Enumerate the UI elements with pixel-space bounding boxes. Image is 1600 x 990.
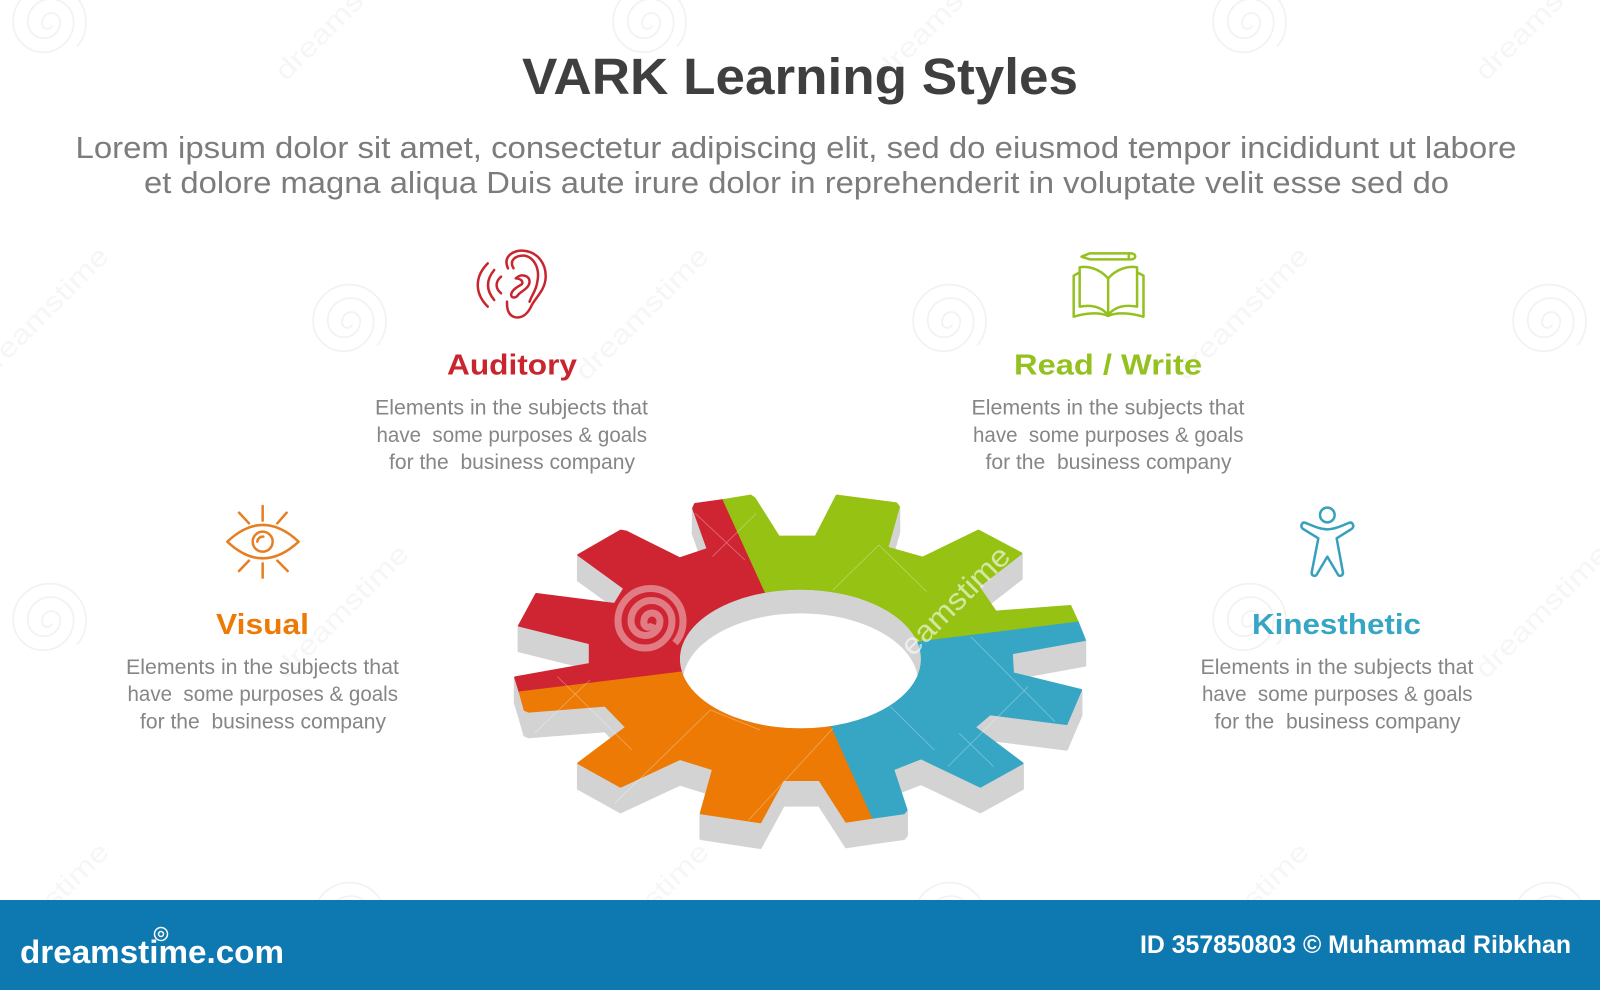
text block: Read / Write description: for the business company — [986, 451, 1232, 474]
text block: Auditory description — [375, 396, 648, 474]
heading: Read / Write: Read / Write — [1014, 350, 1202, 382]
gear hole — [680, 590, 921, 728]
gear segment: blue — [800, 623, 1085, 818]
text block: Visual description — [126, 656, 399, 734]
watermark wordmarks: dreamstime — [1169, 837, 1315, 982]
subtitle text: Lorem ipsum dolor sit amet, consectetur adipiscing elit, sed do eiusmod tempor incididunt ut labore — [76, 130, 1516, 165]
subtitle text — [76, 130, 1516, 200]
icon: person — [1301, 508, 1353, 576]
faint watermark lines on gear — [534, 513, 1055, 820]
icon: eye — [227, 506, 299, 578]
gear segment: orange — [520, 659, 873, 822]
text block: Kinesthetic description: for the business company — [1214, 710, 1461, 734]
gear side extrusion — [515, 497, 1085, 848]
text block: Visual description: for the business company — [140, 710, 386, 734]
gear segment: red — [515, 500, 800, 692]
icon: book and pencil — [1074, 253, 1143, 317]
gear diagram — [515, 496, 1085, 848]
text block: Kinesthetic description — [1200, 656, 1474, 734]
text block: Kinesthetic description: have some purposes & goals — [1202, 683, 1472, 706]
text block: Auditory description: for the business company — [389, 451, 635, 474]
text block: Visual description: Elements in the subjects that — [126, 656, 399, 679]
footer bar — [0, 900, 1600, 990]
text block: Read / Write description: have some purposes & goals — [973, 424, 1244, 447]
watermark wordmarks: dreamstime — [269, 539, 415, 684]
icon: ear — [478, 251, 546, 317]
text block: Read / Write description: Elements in the subjects that — [972, 396, 1245, 420]
subtitle text: et dolore magna aliqua Duis aute irure dolor in reprehenderit in voluptate velit esse sed do — [144, 165, 1449, 200]
watermark wordmarks: dreamstime — [1169, 241, 1315, 386]
watermark wordmarks: dreamstime — [1469, 539, 1600, 684]
heading: Visual: Visual — [216, 609, 309, 641]
text block: Kinesthetic description: Elements in the subjects that — [1200, 656, 1474, 679]
text block: Auditory description: Elements in the subjects that — [375, 396, 648, 420]
title: VARK Learning Styles — [522, 48, 1078, 105]
text block: Visual description: have some purposes & goals — [128, 683, 398, 706]
watermark wordmarks: dreamstime — [569, 241, 715, 386]
heading: Kinesthetic: Kinesthetic — [1252, 609, 1421, 641]
footer credit: ID 357850803 © Muhammad Ribkhan — [1140, 931, 1571, 959]
text block: Read / Write description — [972, 396, 1245, 474]
gear segment: green — [724, 496, 1078, 659]
text block: Auditory description: have some purposes & goals — [376, 424, 647, 447]
watermark spiral on gear — [618, 588, 683, 648]
watermark wordmark on gear: dreamstime — [874, 539, 1017, 683]
footer logo: dreamstime.com — [20, 934, 284, 970]
watermark wordmarks: dreamstime — [569, 837, 715, 982]
heading: Auditory: Auditory — [447, 350, 577, 382]
